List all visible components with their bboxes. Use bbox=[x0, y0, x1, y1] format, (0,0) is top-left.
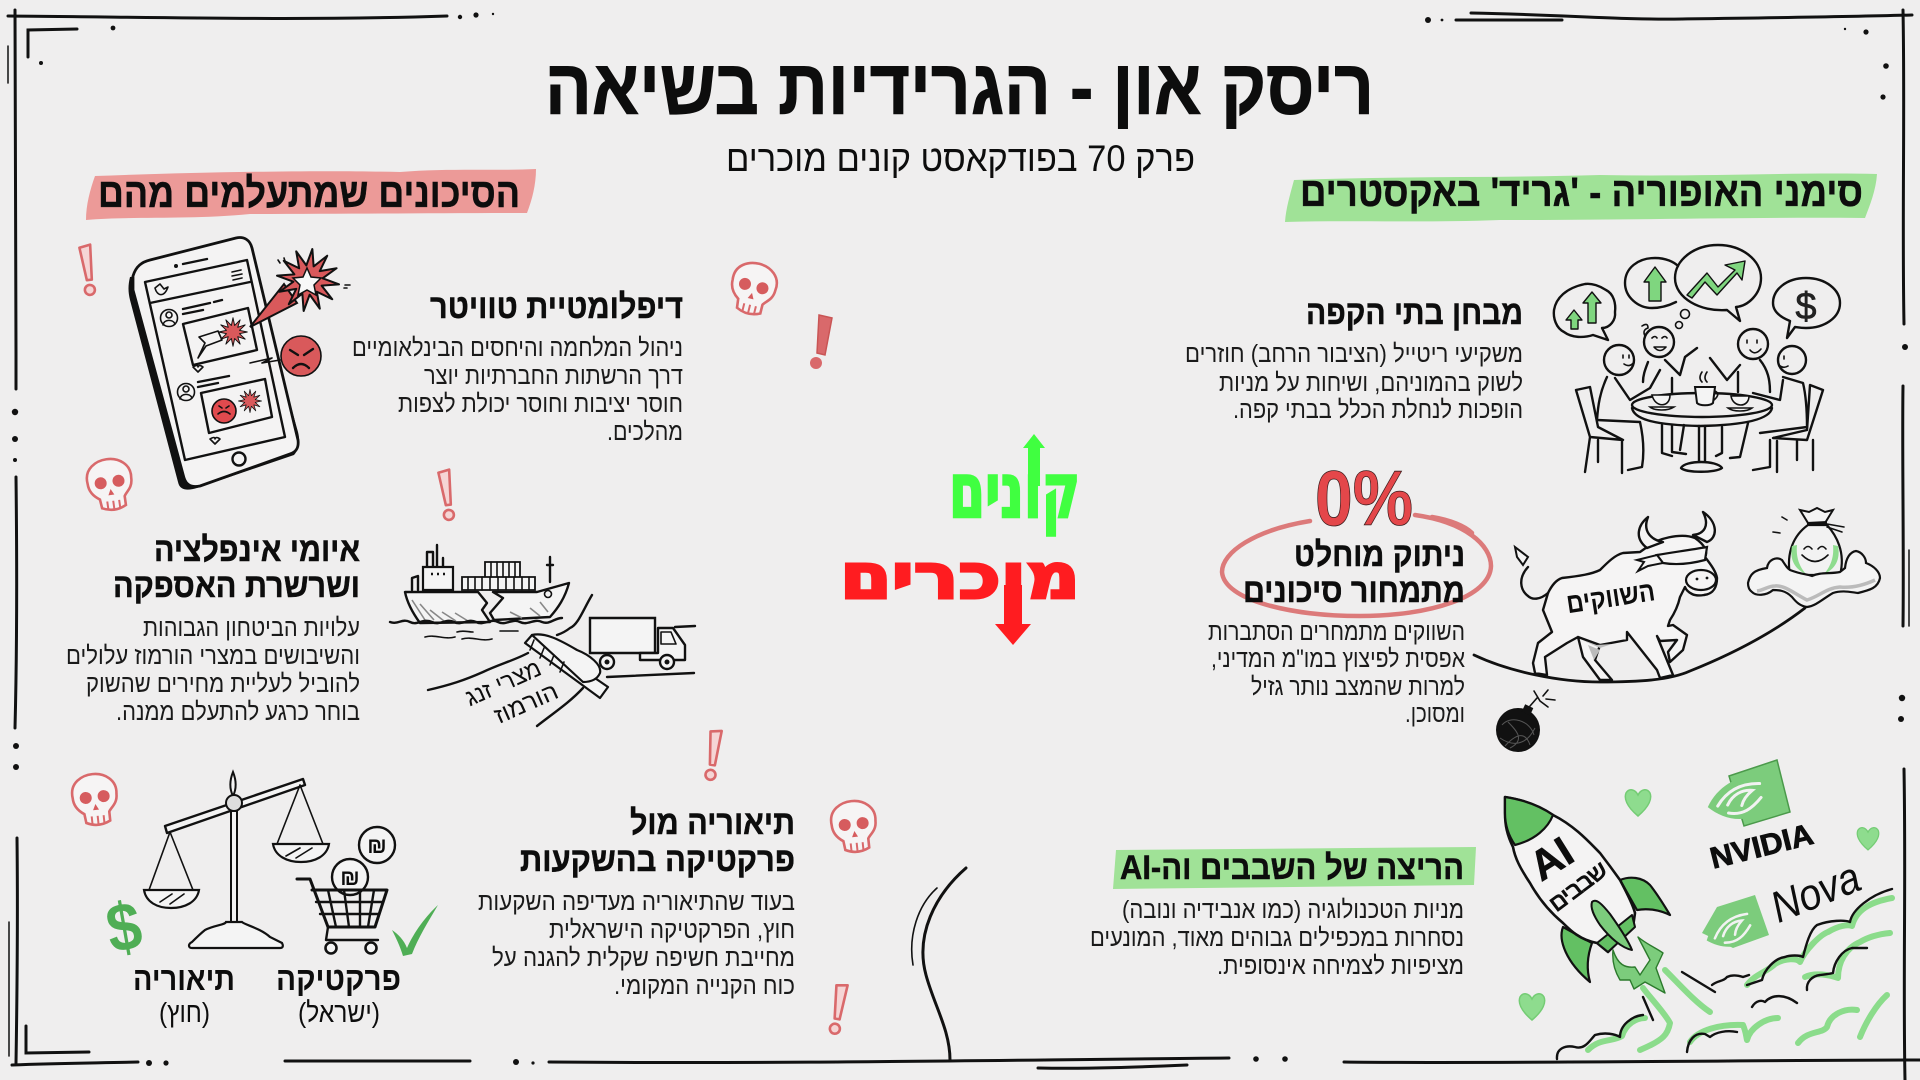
body text: לשוק בהמוניהם, ושיחות על מניות bbox=[1219, 369, 1523, 397]
panel: twitter diplomacy bbox=[128, 237, 683, 490]
panel: theory vs practice bbox=[101, 772, 795, 1028]
icon: Nova logo bbox=[1701, 853, 1867, 953]
icon: green check mark bbox=[392, 905, 438, 956]
label: theory bbox=[133, 960, 235, 1028]
big zero percent figure: 0% bbox=[1315, 454, 1413, 542]
label: strait of hormuz: מצרי זנג bbox=[461, 655, 545, 712]
heading: מתמחור סיכונים bbox=[1243, 572, 1465, 610]
heading: מבחן בתי הקפה bbox=[1306, 294, 1523, 332]
label: strait of hormuz bbox=[461, 655, 562, 730]
body text: משקיעי ריטייל (הציבור הרחב) חוזרים bbox=[1185, 340, 1523, 368]
heading: ignored risks: הסיכונים שמתעלמים מהם bbox=[98, 170, 520, 216]
body text: למרות שהמצב נותר גזיל bbox=[1251, 673, 1465, 701]
label: theory: תיאוריה bbox=[133, 960, 235, 997]
body text: והשיבושים במצרי הורמוז עלולים bbox=[66, 642, 360, 670]
icon: shopping cart with shekel coins: ₪ bbox=[340, 865, 360, 890]
body text: ומסוכן. bbox=[1405, 700, 1465, 728]
center: sellers word with down arrow bbox=[840, 540, 1080, 645]
body text: הופכות לנחלת הכלל בבתי קפה. bbox=[1233, 396, 1523, 424]
illustration: blindfolded bull on a tightrope bbox=[1474, 512, 1805, 682]
body text: כוח הקנייה המקומי. bbox=[614, 972, 795, 1000]
illustration: friends at a cafe table bbox=[1554, 245, 1840, 473]
hand drawn red circle bbox=[1222, 515, 1491, 616]
panel: chips and AI rally bbox=[1090, 760, 1892, 1059]
body text bbox=[352, 334, 683, 446]
label: strait of hormuz: הורמוז bbox=[490, 678, 562, 730]
icon: NVIDIA logo: NVIDIA bbox=[1707, 818, 1817, 875]
label: theory: (חוץ) bbox=[159, 997, 210, 1028]
illustration: smiling money bag on a cloud bbox=[1748, 508, 1880, 607]
heading bbox=[113, 531, 360, 605]
heading with green highlight: הריצה של השבבים וה-AI bbox=[1120, 849, 1464, 887]
icons: green hearts bbox=[1519, 790, 1879, 1020]
heading: פרקטיקה בהשקעות bbox=[520, 841, 795, 879]
panel: inflation and supply chain bbox=[66, 531, 695, 730]
body text: בעוד שהתיאוריה מעדיפה השקעות bbox=[478, 888, 795, 916]
body text bbox=[478, 888, 795, 1000]
green smoke clouds bbox=[1557, 889, 1892, 1059]
panel: zero percent spread bbox=[1208, 454, 1880, 752]
label on rocket: AI bbox=[1521, 828, 1582, 890]
illustration: balance scale bbox=[144, 772, 329, 948]
decorative red skulls and exclamation marks bbox=[70, 245, 879, 1035]
icon: shopping cart with shekel coins bbox=[297, 827, 395, 954]
icon: Nova logo: Nova bbox=[1764, 853, 1867, 933]
icon: shopping cart with shekel coins: ₪ bbox=[367, 833, 387, 858]
body text: מציפיות לצמיחה אינסופית. bbox=[1217, 952, 1464, 980]
body text bbox=[66, 614, 360, 726]
people and chairs bbox=[1576, 324, 1823, 473]
body text: מהלכים. bbox=[607, 418, 683, 446]
illustration: cracked ship, strait and truck bbox=[390, 545, 695, 730]
icon: dollar sign: $ bbox=[101, 887, 147, 968]
speech bubbles: $ bbox=[1795, 286, 1817, 328]
heading: איומי אינפלציה bbox=[154, 531, 360, 569]
title: ריסק און - הגרידיות בשיאה bbox=[545, 43, 1374, 131]
body text: ניהול המלחמה והיחסים הבינלאומיים bbox=[352, 334, 683, 362]
body text: חוץ, הפרקטיקה הישראלית bbox=[549, 916, 795, 944]
heading: תיאוריה מול bbox=[630, 804, 795, 842]
body text: מניות הטכנולוגיה (כמו אנבידיה ונובה) bbox=[1122, 896, 1464, 924]
body text: בוחר כרגע להתעלם ממנה. bbox=[116, 698, 360, 726]
body text: אפסית לפיצוץ במו"מ המדיני, bbox=[1211, 645, 1465, 673]
label: practice: פרקטיקה bbox=[276, 960, 401, 997]
panel: coffee shop test bbox=[1185, 245, 1840, 473]
body text: עלויות הביטחון הגבוהות bbox=[143, 614, 360, 642]
illustration: phone with tweets bbox=[128, 237, 350, 490]
heading bbox=[520, 804, 795, 879]
illustration: rocket taking off bbox=[1505, 797, 1670, 993]
center: buyers word with up arrow: קונים bbox=[949, 446, 1080, 535]
label on rocket bbox=[1521, 828, 1613, 918]
body text bbox=[1208, 618, 1465, 728]
icon: lit bomb bbox=[1496, 690, 1555, 752]
body text: דרך הרשתות החברתיות יוצר bbox=[424, 362, 683, 390]
body text: מחייבת חשיפה שקלית להגנה על bbox=[492, 944, 795, 972]
heading: דיפלומטיית טוויטר bbox=[430, 288, 683, 326]
illustration: blindfolded bull on a tightrope: השווקים bbox=[1564, 575, 1657, 619]
body text: נסחרות במכפילים גבוהים מאוד, המונעים bbox=[1090, 924, 1464, 952]
heading: euphoria signs: סימני האופוריה - 'גריד' באקסטרים bbox=[1300, 169, 1863, 215]
heading bbox=[1243, 536, 1465, 610]
center: sellers word with down arrow: מוכרים bbox=[840, 540, 1080, 613]
body text: חוסר יציבות וחוסר יכולת לצפות bbox=[398, 390, 683, 418]
body text: השווקים מתמחרים הסתברות bbox=[1208, 618, 1465, 646]
heading: ניתוק מוחלט bbox=[1294, 536, 1465, 574]
speech bubbles bbox=[1554, 245, 1840, 340]
icon: NVIDIA logo bbox=[1705, 760, 1817, 875]
body text: להוביל לעליית מחירים שהשוק bbox=[86, 670, 360, 698]
label: practice: (ישראל) bbox=[298, 997, 380, 1028]
body text bbox=[1090, 896, 1464, 980]
label: practice bbox=[276, 960, 401, 1028]
table with mugs bbox=[1632, 372, 1772, 472]
label on rocket: שבבים bbox=[1544, 856, 1613, 918]
subtitle: פרק 70 בפודקאסט קונים מוכרים bbox=[726, 138, 1195, 179]
body text bbox=[1185, 340, 1523, 424]
center: buyers word with up arrow bbox=[949, 434, 1080, 535]
heading: ושרשרת האספקה bbox=[113, 567, 360, 605]
